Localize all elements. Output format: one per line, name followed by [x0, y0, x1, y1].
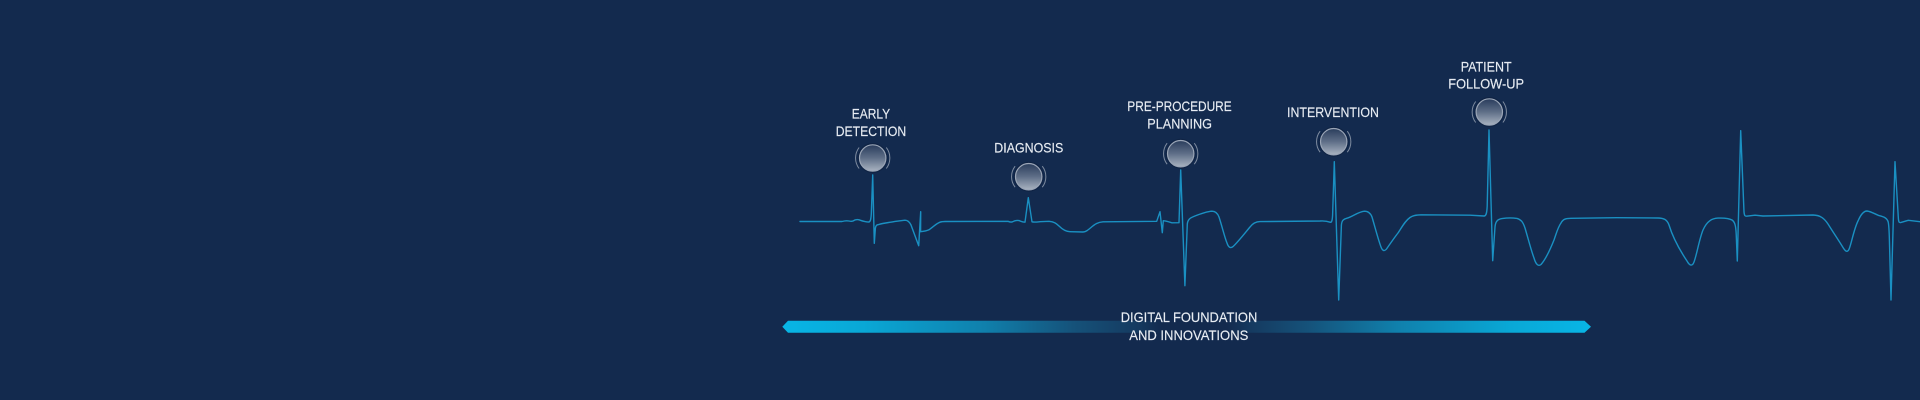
label: early detection [836, 106, 906, 139]
icon: marker early detection [856, 143, 890, 173]
icon: marker diagnosis [1012, 162, 1046, 192]
label: patient follow-up: PATIENT [1461, 59, 1512, 75]
label: diagnosis: DIAGNOSIS [994, 140, 1063, 156]
arrow: double-headed gradient bar [782, 321, 1591, 333]
icon: marker patient follow-up [1472, 97, 1506, 127]
label: intervention: INTERVENTION [1287, 104, 1379, 120]
milestone: patient follow-up [1448, 59, 1524, 127]
icon: marker intervention [1317, 127, 1351, 157]
label: early detection: DETECTION [836, 123, 906, 139]
milestone: early detection [836, 106, 906, 173]
label: pre-procedure planning: PRE-PROCEDURE [1127, 98, 1232, 114]
label: pre-procedure planning: PLANNING [1147, 115, 1212, 131]
milestone: diagnosis [994, 140, 1063, 192]
label: patient follow-up: FOLLOW-UP [1448, 76, 1524, 92]
label: digital foundation and innovations [1121, 309, 1257, 343]
label: digital foundation and innovations: AND INNOVATIONS [1129, 327, 1248, 343]
icon: marker pre-procedure planning [1164, 139, 1198, 169]
label: patient follow-up [1448, 59, 1524, 92]
label: pre-procedure planning [1127, 98, 1232, 131]
milestone: pre-procedure planning [1127, 98, 1232, 169]
label: early detection: EARLY [852, 106, 891, 122]
ECG waveform trace [800, 130, 1920, 300]
milestone: intervention [1287, 104, 1379, 157]
label: digital foundation and innovations: DIGITAL FOUNDATION [1121, 309, 1257, 325]
